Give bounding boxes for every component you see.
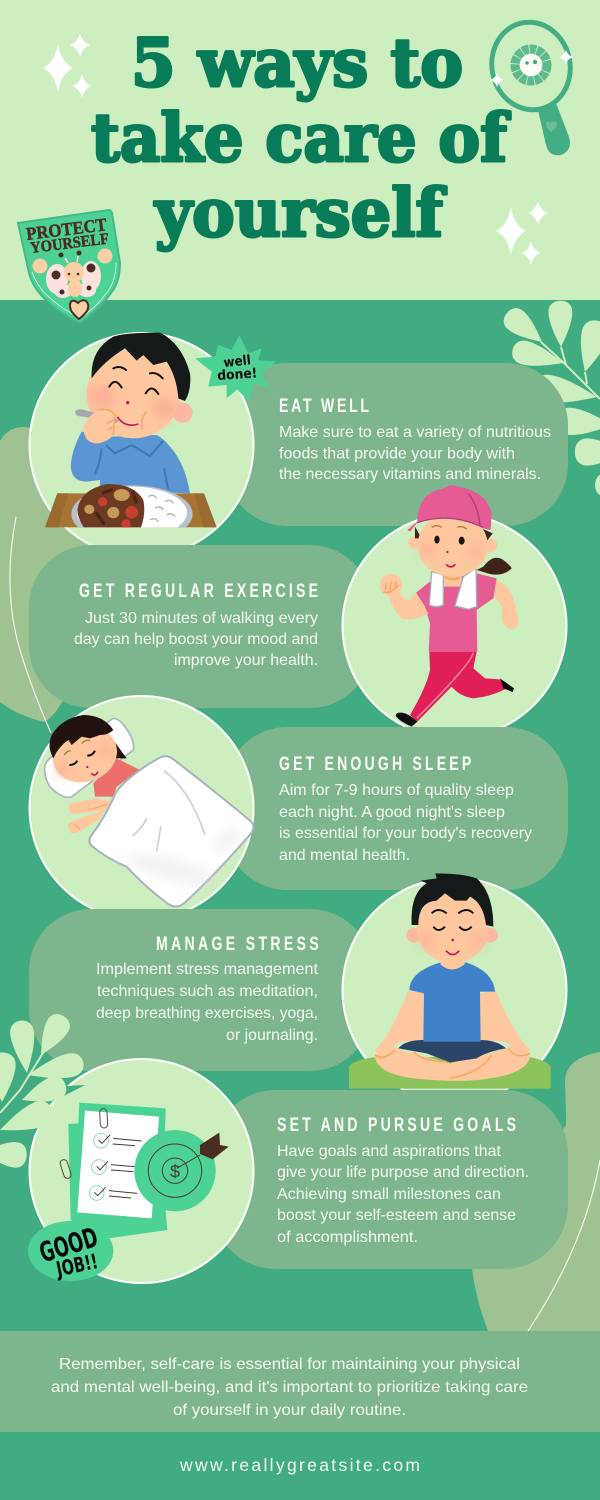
illustration: checklist and target: JOB!!: [53, 1249, 100, 1282]
title: [91, 24, 510, 252]
badge: protect yourself: YOURSELF: [29, 230, 110, 257]
title: take care of: [91, 99, 510, 177]
text: set and pursue goals: [277, 1114, 529, 1246]
text: get regular exercise: improve your health.: [174, 652, 318, 669]
text: eat well: foods that provide your body with: [279, 446, 515, 462]
badge: protect yourself: PROTECT: [25, 214, 108, 244]
text: get enough sleep: [279, 753, 532, 864]
icon: well done starburst: done!: [217, 366, 258, 384]
icon: well done starburst: [195, 335, 276, 402]
circle: sleep illustration: [30, 696, 254, 920]
text: get enough sleep: GET ENOUGH SLEEP: [279, 753, 471, 775]
text: set and pursue goals: Achieving small milestones can: [277, 1186, 501, 1203]
circle: stress illustration: [342, 873, 566, 1102]
panel: closing note band: [0, 1331, 600, 1432]
text: set and pursue goals: give your life purpose and direction.: [277, 1164, 529, 1181]
icon: well done starburst: well: [223, 353, 252, 371]
left white curve: [10, 517, 51, 733]
text: get regular exercise: GET REGULAR EXERCISE: [79, 580, 318, 602]
text: get enough sleep: is essential for your body's recovery: [279, 825, 532, 842]
icon: sparkles right: [496, 201, 548, 265]
text: closing note: of yourself in your daily routine.: [173, 1402, 406, 1419]
badge: protect yourself: [18, 210, 120, 323]
text: get regular exercise: Just 30 minutes of walking every: [85, 610, 318, 627]
illustration: checklist and target: $: [170, 1161, 180, 1181]
text: closing note: Remember, self-care is essential for maintaining your physical: [59, 1356, 520, 1373]
panel: sleep pill: [225, 727, 568, 890]
text: manage stress: Implement stress management: [96, 961, 319, 978]
text: manage stress: MANAGE STRESS: [156, 933, 319, 955]
leaves: lower left: [0, 1010, 86, 1169]
text: set and pursue goals: SET AND PURSUE GOALS: [277, 1114, 516, 1136]
title: 5 ways to: [131, 24, 463, 102]
text: set and pursue goals: of accomplishment.: [277, 1229, 418, 1246]
illustration: checklist and target: [28, 1103, 229, 1282]
text: manage stress: [96, 933, 319, 1044]
text: closing note: and mental well-being, and it's important to prioritize taking care: [51, 1379, 528, 1396]
text: eat well: the necessary vitamins and minerals.: [279, 466, 541, 483]
text: eat well: [279, 395, 551, 483]
text: eat well: Make sure to eat a variety of nutritious: [279, 424, 551, 441]
text: manage stress: or journaling.: [226, 1027, 318, 1044]
text: get regular exercise: [74, 580, 318, 669]
illustration: boy eating curry: [45, 333, 217, 543]
text: website: www.reallygreatsite.com: [179, 1455, 420, 1475]
leaves: top right: [499, 301, 600, 497]
panel: eat well pill: [225, 363, 568, 526]
text: manage stress: techniques such as meditation,: [97, 983, 318, 1000]
text: get regular exercise: day can help boost your mood and: [74, 631, 318, 648]
text: eat well: EAT WELL: [279, 395, 369, 417]
circle: goals illustration: [28, 1059, 253, 1283]
text: closing note: [51, 1356, 528, 1419]
panel: exercise pill: [29, 545, 372, 708]
icon: sparkles left: [43, 33, 92, 98]
left background blob: [0, 427, 110, 722]
icon: hand mirror: [484, 15, 578, 155]
right white curve: [528, 1160, 600, 1331]
illustration: meditating boy: [349, 873, 551, 1089]
text: get enough sleep: each night. A good night's sleep: [279, 804, 505, 821]
text: get enough sleep: Aim for 7-9 hours of quality sleep: [279, 782, 514, 799]
panel: goals pill: [212, 1090, 568, 1269]
illustration: jogging woman: [380, 485, 518, 727]
illustration: sleeping woman: [45, 715, 253, 907]
header band: [0, 0, 600, 300]
text: set and pursue goals: Have goals and aspirations that: [277, 1143, 502, 1160]
text: set and pursue goals: boost your self-esteem and sense: [277, 1207, 516, 1224]
text: get enough sleep: and mental health.: [279, 847, 410, 864]
title: yourself: [154, 174, 446, 252]
text: manage stress: deep breathing exercises, yoga,: [96, 1005, 318, 1022]
right background blob: [472, 1052, 600, 1331]
circle: exercise illustration: [342, 485, 566, 738]
circle: eat well illustration: [30, 333, 254, 557]
panel: stress pill: [29, 909, 372, 1071]
illustration: checklist and target: GOOD: [36, 1222, 102, 1269]
